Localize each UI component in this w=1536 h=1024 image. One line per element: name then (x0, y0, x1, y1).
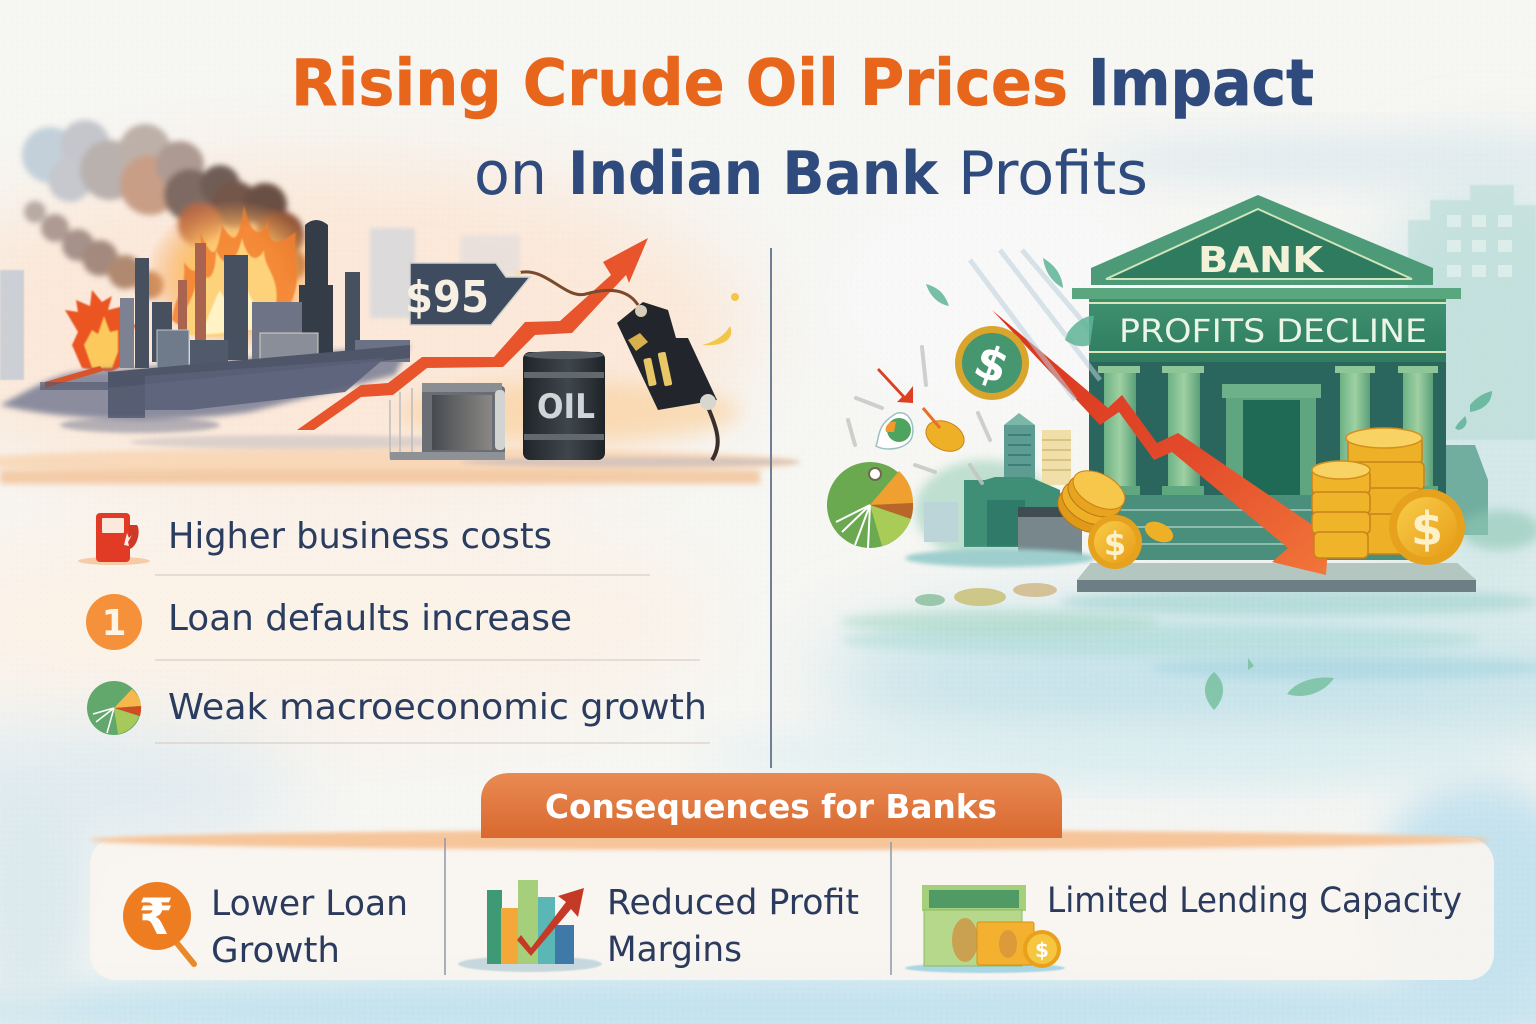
title: Indian Bank (568, 139, 940, 209)
smoke plume upper (22, 120, 306, 281)
divider: centre (770, 248, 772, 768)
icon: rupee magnifier: ₹ (139, 888, 173, 946)
panel background (90, 838, 1494, 980)
icon: gold dollar coin large: $ (1411, 502, 1443, 556)
icon: tilted coins and gold coin: $ (1104, 525, 1126, 563)
ground wash under oil scene (0, 382, 800, 484)
title (291, 47, 1314, 209)
text: lower loan growth: Growth (211, 931, 340, 971)
text: reduced profit margins: Reduced Profit (607, 883, 859, 923)
icon: pie chart large (827, 462, 913, 548)
list: causes (78, 513, 710, 743)
icon: oil barrel (523, 351, 605, 460)
title: Rising Crude Oil Prices (291, 47, 1068, 121)
bank door (1222, 384, 1321, 495)
illustration: refinery on fire (0, 120, 520, 419)
illustration: bank building (1072, 195, 1476, 592)
icon: green dollar coin: $ (967, 333, 1016, 395)
icon: tilted coins and gold coin (1050, 463, 1176, 569)
icon: green dollar coin (955, 326, 1029, 400)
orange wash (90, 830, 1490, 850)
heading pill: consequences for banks: Consequences for Banks (545, 787, 997, 826)
icon: number 1 badge (86, 594, 142, 650)
heading pill: consequences for banks (481, 773, 1062, 838)
icon: falling items (848, 250, 1100, 483)
text: weak macroeconomic growth: Weak macroeconomic growth (168, 687, 707, 728)
icon: rupee magnifier (123, 882, 194, 964)
icon: number 1 badge: 1 (101, 603, 127, 644)
falling profit arrow (992, 310, 1330, 575)
text: lower loan growth (211, 884, 408, 971)
bank columns (1098, 366, 1438, 495)
text: limited lending capacity: Limited Lending Capacity (1047, 881, 1462, 921)
icon: fuel pump (78, 513, 150, 565)
icon: fuel nozzle (617, 293, 739, 460)
icon: pie chart small (87, 681, 141, 735)
icon: gold dollar coin large (1389, 489, 1465, 565)
title: Profits (958, 139, 1148, 209)
flames behind towers (172, 205, 297, 334)
text: higher business costs: Higher business costs (168, 516, 552, 557)
text: reduced profit margins: Margins (607, 930, 742, 970)
title: Impact (1088, 47, 1314, 121)
rising price arrow (297, 238, 648, 430)
icon: oil barrel: OIL (537, 387, 595, 427)
title: on (474, 139, 547, 209)
illustration: city behind bank (905, 185, 1536, 567)
icon: leaves (915, 258, 1492, 710)
icon: cash and coin (905, 885, 1065, 973)
coin stacks (1312, 428, 1424, 558)
text: lower loan growth: Lower Loan (211, 884, 408, 924)
icon: generator box (390, 383, 505, 460)
text: profits decline: PROFITS DECLINE (1119, 312, 1427, 350)
icon: cash and coin: $ (1035, 938, 1049, 962)
text: bank: BANK (1198, 240, 1324, 281)
text: reduced profit margins (607, 883, 859, 970)
price tag: $95 (405, 263, 638, 325)
icon: bar chart with check (458, 880, 602, 972)
smoke plume lower (24, 201, 164, 299)
price tag: $95: $95 (405, 272, 489, 323)
text: loan defaults increase: Loan defaults increase (168, 598, 572, 639)
panel: consequences (90, 773, 1494, 980)
